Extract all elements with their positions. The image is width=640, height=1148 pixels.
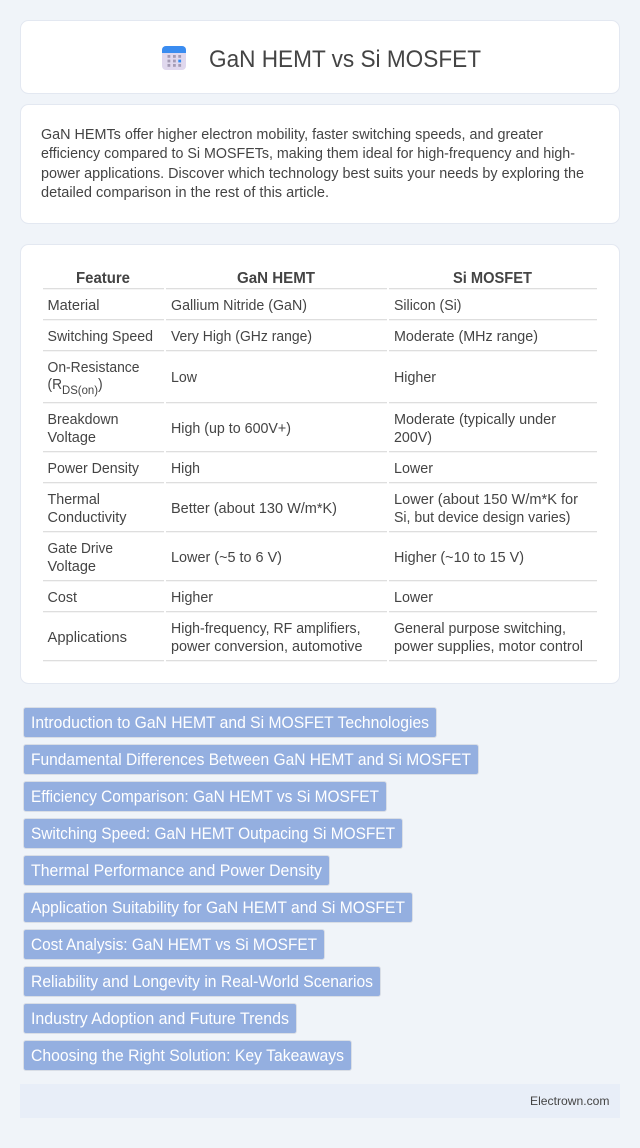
- link: key takeaways: [24, 1040, 352, 1070]
- row: breakdown voltage: [48, 412, 556, 446]
- link: cost analysis: Cost Analysis: GaN HEMT vs Si MOSFET: [31, 936, 317, 954]
- row: applications: Applications: [48, 630, 127, 646]
- table header row: GaN HEMT: [237, 270, 316, 287]
- link: switching speed: [24, 818, 402, 848]
- row: breakdown voltage: Breakdown: [48, 412, 118, 428]
- link: reliability: Reliability and Longevity in Real-World Scenarios: [31, 973, 373, 991]
- row: breakdown voltage: High (up to 600V+): [171, 421, 291, 437]
- link: efficiency comparison: Efficiency Comparison: GaN HEMT vs Si MOSFET: [31, 788, 379, 806]
- row: on-resistance: Low: [171, 370, 197, 386]
- link: key takeaways: Choosing the Right Solution: Key Takeaways: [31, 1047, 344, 1065]
- row: material: Material: [48, 298, 100, 314]
- table header row: Feature: [76, 270, 130, 287]
- row: on-resistance: On-Resistance: [48, 360, 140, 376]
- panel: table of contents links: [24, 708, 478, 1070]
- link: industry adoption: [24, 1004, 296, 1034]
- link: fundamental differences: Fundamental Differences Between GaN HEMT and Si MOSFET: [31, 751, 471, 769]
- link: thermal performance: [24, 856, 330, 886]
- icon: calendar: [162, 46, 186, 70]
- row: thermal conductivity: Si, but device design varies): [394, 510, 570, 526]
- row: material: [48, 298, 462, 314]
- intro paragraph: power applications. Discover which technology best suits your needs by exploring the: [41, 166, 584, 182]
- panel: comparison table: [20, 244, 620, 684]
- table header row: Si MOSFET: [453, 270, 533, 287]
- row: thermal conductivity: Lower (about 150 W/m*K for: [394, 492, 578, 508]
- row: on-resistance: Higher: [394, 370, 436, 386]
- panel: introduction text: [20, 104, 620, 224]
- intro paragraph: efficiency compared to Si MOSFETs, making them ideal for high-frequency and high-: [41, 146, 575, 162]
- link: efficiency comparison: [24, 782, 386, 812]
- row: power density: [48, 461, 433, 477]
- intro paragraph: GaN HEMTs offer higher electron mobility, faster switching speeds, and greater: [41, 127, 543, 143]
- row: on-resistance: ): [98, 377, 103, 393]
- row: cost: Cost: [48, 590, 77, 606]
- intro paragraph: detailed comparison in the rest of this article.: [41, 185, 329, 201]
- link: switching speed: Switching Speed: GaN HEMT Outpacing Si MOSFET: [31, 825, 395, 843]
- row: gate drive voltage: Gate Drive: [48, 541, 113, 557]
- link: introduction: [24, 708, 436, 738]
- row: on-resistance: (R: [48, 377, 62, 393]
- row: thermal conductivity: Conductivity: [48, 510, 127, 526]
- row: applications: General purpose switching,: [394, 621, 566, 637]
- row: applications: [48, 621, 583, 655]
- row: applications: High-frequency, RF amplifiers,: [171, 621, 360, 637]
- row: power density: Lower: [394, 461, 433, 477]
- row: cost: Lower: [394, 590, 433, 606]
- row: switching speed: Switching Speed: [48, 329, 153, 345]
- intro paragraph: [41, 127, 584, 201]
- link: cost analysis: [24, 930, 324, 960]
- row: material: Silicon (Si): [394, 298, 462, 314]
- link: application suitability: Application Suitability for GaN HEMT and Si MOSFET: [31, 899, 405, 917]
- link: application suitability: [24, 892, 412, 922]
- link: reliability: [24, 966, 380, 996]
- row: breakdown voltage: 200V): [394, 430, 432, 446]
- row: thermal conductivity: [48, 492, 578, 526]
- row: thermal conductivity: Better (about 130 W/m*K): [171, 501, 337, 517]
- row: cost: [48, 590, 433, 606]
- table header row: [76, 270, 533, 287]
- row: gate drive voltage: [48, 541, 524, 575]
- row: breakdown voltage: Voltage: [48, 430, 96, 446]
- row: gate drive voltage: Lower (~5 to 6 V): [171, 550, 282, 566]
- row: power density: Power Density: [48, 461, 140, 477]
- panel: title header: [20, 20, 620, 94]
- row: on-resistance: DS(on): [62, 383, 98, 397]
- row: switching speed: Moderate (MHz range): [394, 329, 538, 345]
- footer: Electrown.com: [530, 1094, 610, 1108]
- title: GaN HEMT vs Si MOSFET: [209, 46, 481, 73]
- link: fundamental differences: [24, 744, 478, 774]
- row: switching speed: Very High (GHz range): [171, 329, 312, 345]
- row: material: Gallium Nitride (GaN): [171, 298, 307, 314]
- link: thermal performance: Thermal Performance and Power Density: [31, 862, 323, 880]
- row: gate drive voltage: Higher (~10 to 15 V): [394, 550, 524, 566]
- row: breakdown voltage: Moderate (typically under: [394, 412, 556, 428]
- row: on-resistance: [48, 360, 436, 397]
- row: thermal conductivity: Thermal: [48, 492, 100, 508]
- row: applications: power conversion, automotive: [171, 639, 362, 655]
- row: cost: Higher: [171, 590, 213, 606]
- row: gate drive voltage: Voltage: [48, 559, 96, 575]
- footer: [20, 1084, 620, 1118]
- row: switching speed: [48, 329, 538, 345]
- link: introduction: Introduction to GaN HEMT and Si MOSFET Technologies: [31, 714, 429, 732]
- row: applications: power supplies, motor control: [394, 639, 583, 655]
- link: industry adoption: Industry Adoption and Future Trends: [31, 1010, 289, 1028]
- row: power density: High: [171, 461, 200, 477]
